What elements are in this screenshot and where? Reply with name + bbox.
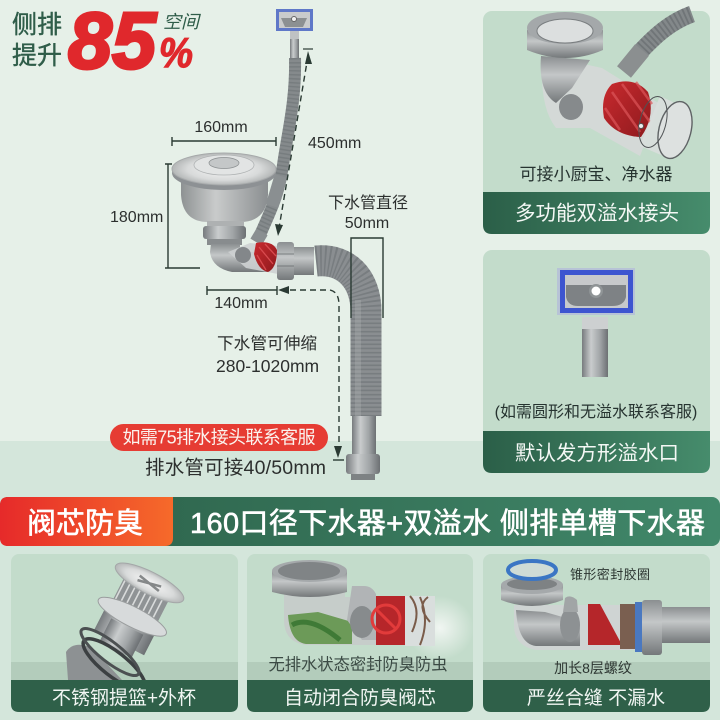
label band: [483, 680, 710, 712]
label band: 默认发方形溢水口: [515, 442, 679, 465]
joint image: [527, 12, 698, 162]
dimension: 140mm: [207, 286, 277, 312]
seal ring label: 锥形密封胶圈: [570, 567, 650, 582]
product diagram: sink drain with overflow hose and downpipe: [172, 9, 380, 480]
thread label: 加长8层螺纹: [554, 660, 632, 676]
title banner: [0, 497, 720, 546]
headline label second line: 提升: [12, 42, 62, 70]
callout: 75 drain fitting: [110, 424, 328, 451]
dimension: 450mm dashed arrow: 450mm: [308, 135, 361, 152]
headline: side drain gains 85% space: [12, 0, 201, 85]
elbow and valve: [210, 242, 278, 274]
telescopic length text: [216, 334, 319, 376]
telescopic length text: 下水管可伸缩: [217, 334, 317, 353]
valve cutaway image: [272, 560, 474, 660]
label band: 不锈钢提篮+外杯: [52, 687, 196, 709]
dimension: 180mm: 180mm: [110, 209, 163, 226]
label band: 严丝合缝 不漏水: [527, 687, 665, 709]
square overflow image: [557, 268, 635, 377]
basket exploded image: [66, 556, 188, 697]
odor-proof tag: [0, 497, 173, 546]
dimension: 450mm dashed arrow: [275, 49, 361, 236]
dimension: pipe diameter 50mm: 下水管直径: [328, 194, 408, 212]
space label: 空间: [163, 12, 201, 32]
caption: (如需圆形和无溢水联系客服): [495, 403, 697, 421]
percent sign: %: [159, 29, 193, 76]
label band: 多功能双溢水接头: [515, 202, 679, 225]
threaded nut: [203, 221, 246, 245]
label band: [483, 192, 710, 234]
panel: multi-function overflow joint: [483, 11, 710, 234]
overflow hose: [256, 58, 295, 242]
panel: tight thread seal: [483, 554, 710, 712]
label band: [483, 431, 710, 473]
corrugated drain hose: [316, 261, 366, 416]
panel: stainless basket: [11, 554, 238, 712]
panel: square overflow outlet: [483, 250, 710, 473]
headline label: 侧排: [12, 11, 62, 39]
seal and thread image: [501, 561, 710, 655]
dimension: telescopic downpipe dashed arrow: [278, 286, 344, 460]
caption: 无排水状态密封防臭防虫: [268, 656, 448, 674]
outlet pipe: [346, 416, 380, 480]
dimension: 160mm: [172, 119, 276, 146]
telescopic length text: 280-1020mm: [216, 356, 319, 376]
drain basket cup: [172, 153, 276, 222]
callout: 75 drain fitting: 如需75排水接头联系客服: [122, 428, 316, 448]
label band: [247, 680, 473, 712]
union connector: [277, 242, 314, 280]
label band: 自动闭合防臭阀芯: [284, 687, 436, 709]
dimension: 160mm: 160mm: [194, 119, 248, 136]
dimension: pipe diameter 50mm: 50mm: [345, 215, 389, 232]
overflow outlet small: [276, 9, 313, 59]
caption: 可接小厨宝、净水器: [520, 165, 672, 184]
panel: auto-closing odor valve: [247, 554, 474, 712]
label band: [11, 680, 238, 712]
dimension: pipe diameter 50mm: [328, 194, 408, 318]
odor-proof tag: 阀芯防臭: [27, 507, 143, 540]
dimension: 180mm: [110, 164, 200, 268]
dimension: 140mm: 140mm: [214, 295, 268, 312]
banner title: 160口径下水器+双溢水 侧排单槽下水器: [190, 507, 705, 540]
drain pipe size text: 排水管可接40/50mm: [145, 457, 326, 479]
